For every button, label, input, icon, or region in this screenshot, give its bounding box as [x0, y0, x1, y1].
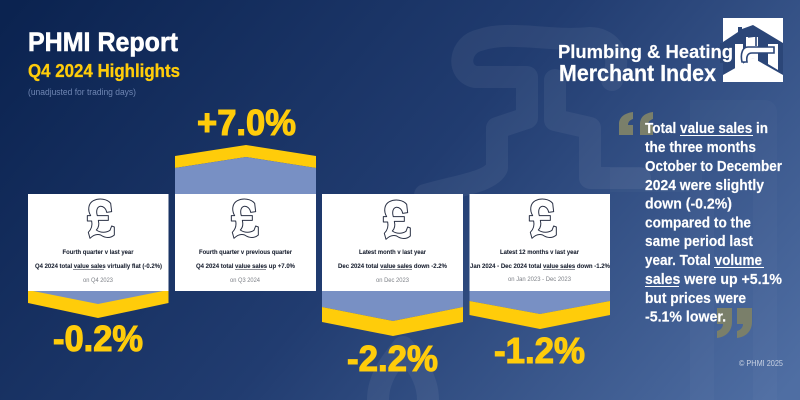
- icon: pound: [529, 199, 556, 238]
- quote text: [645, 120, 782, 326]
- card description: Dec 2024 total value sales down -2.2%: [338, 263, 447, 270]
- logo: [558, 18, 783, 86]
- panel: latest 12 months v last year: [470, 194, 610, 371]
- quote text: Total value sales in: [645, 120, 768, 137]
- panel: fourth quarter v last year: [28, 194, 168, 359]
- card: [470, 194, 610, 291]
- watermark: tap and pipes: [378, 36, 640, 400]
- quote text: the three months: [645, 139, 756, 156]
- title: PHMI Report: [28, 27, 178, 57]
- card: [175, 194, 316, 291]
- logo mark: [720, 18, 783, 82]
- card: [28, 194, 168, 291]
- card comparison: on Jan 2023 - Dec 2023: [508, 276, 571, 283]
- quote text: same period last: [645, 233, 753, 250]
- card description: Q4 2024 total value sales virtually flat (-0.2%): [35, 263, 162, 270]
- card description: Q4 2024 total value sales up +7.0%: [196, 263, 295, 270]
- card heading: Fourth quarter v previous quarter: [199, 249, 292, 256]
- card comparison: on Q3 2024: [230, 277, 260, 284]
- card heading: Latest 12 months v last year: [500, 249, 579, 256]
- card description: Jan 2024 - Dec 2024 total value sales down -1.2%: [470, 263, 610, 270]
- logo text: Plumbing & Heating: [558, 42, 733, 62]
- logo: Merchant Index: [559, 60, 716, 86]
- icon: pound: [231, 199, 258, 238]
- quote text: -5.1% lower.: [645, 308, 726, 326]
- panel: fourth quarter v previous quarter: [175, 102, 316, 291]
- icon: opening quote: [619, 112, 653, 135]
- subtitle: Q4 2024 Highlights: [28, 60, 180, 81]
- quote text: October to December: [645, 158, 782, 175]
- figure: -0.2%: [53, 318, 143, 359]
- ribbon: [28, 291, 168, 318]
- card heading: Latest month v last year: [359, 249, 426, 256]
- card comparison: on Q4 2023: [83, 277, 113, 284]
- figure: +7.0%: [197, 102, 296, 143]
- card comparison: on Dec 2023: [376, 277, 409, 284]
- ribbon: [322, 291, 463, 336]
- quote text: sales were up +5.1%: [645, 271, 782, 288]
- icon: closing quote: [717, 308, 752, 338]
- quote text: 2024 were slightly: [645, 177, 765, 194]
- panel: latest month v last year: [322, 194, 463, 379]
- card heading: Fourth quarter v last year: [62, 249, 134, 256]
- copyright: © PHMI 2025: [739, 358, 783, 368]
- figure: -1.2%: [494, 330, 585, 371]
- quote text: but prices were: [645, 290, 746, 307]
- figure: -2.2%: [347, 338, 438, 379]
- watermark: faint right-hand pipe: [610, 112, 765, 400]
- quote text: down (-0.2%): [645, 196, 732, 212]
- icon: pound: [383, 200, 410, 239]
- quote text: compared to the: [645, 214, 751, 232]
- note: (unadjusted for trading days): [28, 87, 136, 97]
- quote text: year. Total volume: [645, 252, 762, 269]
- ribbon: [470, 291, 610, 329]
- card: [322, 194, 463, 291]
- icon: pound: [87, 199, 114, 238]
- ribbon: [175, 145, 316, 194]
